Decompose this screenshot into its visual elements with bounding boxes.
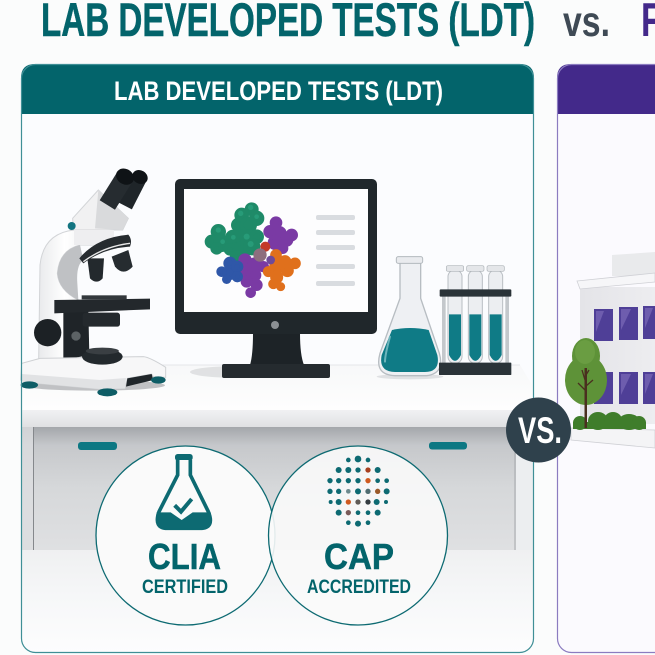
icon: erlenmeyer flask — [377, 257, 443, 379]
monitor stand — [250, 333, 304, 365]
right panel border — [558, 64, 655, 652]
desk surface — [21, 365, 534, 410]
panel header — [21, 64, 534, 114]
panel: lab developed tests — [21, 64, 534, 653]
microscope arm — [39, 230, 113, 360]
flask glass — [379, 263, 441, 376]
tube 1 — [446, 266, 464, 363]
feet — [21, 381, 38, 389]
rack bottom bar — [439, 363, 511, 375]
base — [21, 357, 166, 389]
icon: computer monitor — [175, 179, 377, 378]
CAP circle — [268, 446, 448, 625]
CLIA circle — [96, 446, 275, 625]
monitor screen — [184, 189, 368, 312]
tube 3 — [487, 266, 504, 363]
desk scene — [22, 364, 533, 582]
badge: CLIA certified — [96, 446, 275, 625]
rack posts — [442, 295, 446, 363]
badge: CAP accredited — [268, 446, 448, 625]
bushes — [573, 412, 646, 430]
objectives — [87, 258, 104, 282]
panel header text: LAB DEVELOPED TESTS (LDT) — [114, 76, 443, 106]
lamp — [82, 349, 123, 365]
desk front edge — [21, 410, 534, 427]
CAP label: CAP — [324, 536, 394, 577]
window highlights — [596, 308, 653, 395]
tree — [565, 338, 607, 428]
eyepieces — [125, 177, 140, 206]
icon: hospital building — [565, 252, 655, 448]
right panel header — [557, 64, 655, 114]
VS text: VS. — [518, 410, 562, 451]
flask lip — [396, 257, 423, 263]
CLIA label: CLIA — [148, 536, 221, 577]
VS circle — [506, 398, 571, 462]
VS. badge — [506, 398, 571, 462]
building wall — [580, 287, 655, 424]
icon: test tube rack — [439, 266, 511, 375]
molecule — [207, 204, 299, 296]
panel border — [22, 64, 534, 652]
roof unit — [612, 252, 655, 276]
monitor button — [271, 321, 279, 329]
windows — [594, 306, 655, 404]
right panel background — [557, 64, 655, 653]
icon: dot matrix — [327, 456, 390, 527]
icon: microscope — [21, 165, 166, 396]
accredited label: ACCREDITED — [307, 577, 411, 598]
microscope head — [73, 190, 128, 230]
drawer handle right — [429, 442, 467, 450]
focus knob — [34, 319, 61, 346]
rack top bar — [440, 289, 511, 297]
monitor base — [222, 364, 330, 378]
desk drawers — [21, 427, 534, 550]
floor — [22, 550, 533, 582]
drawer handle left — [78, 442, 117, 450]
roof slab — [577, 273, 655, 289]
flask liquid — [381, 328, 438, 372]
screen text lines — [316, 215, 355, 286]
title — [41, 0, 655, 46]
tube 2 — [467, 266, 484, 363]
monitor shadow — [190, 366, 290, 378]
panel: right comparison — [557, 64, 655, 653]
monitor bezel — [175, 179, 377, 334]
icon: flask with check — [156, 454, 211, 529]
certified label: CERTIFIED — [142, 577, 228, 598]
planter platform — [571, 428, 655, 448]
panel background — [21, 64, 534, 653]
column under stage — [63, 310, 89, 360]
stage — [54, 299, 150, 313]
